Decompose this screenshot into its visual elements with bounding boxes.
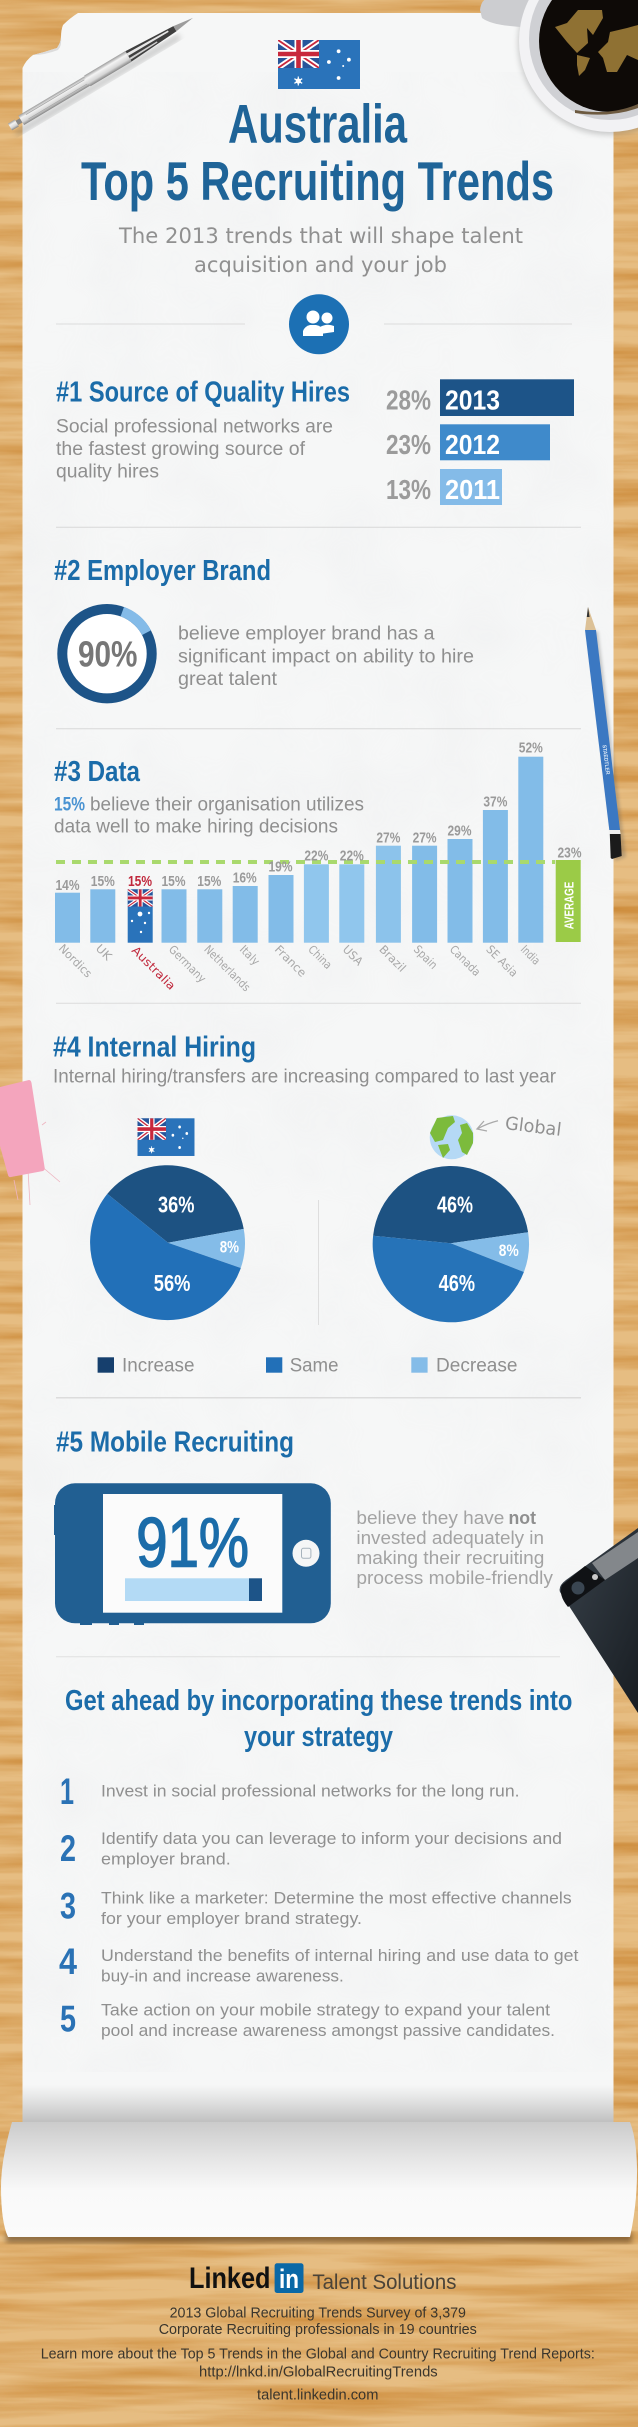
paper roll: [1, 2122, 637, 2243]
panel: recommendations: [59, 1685, 579, 2040]
list item 1: 1: [60, 1771, 74, 1812]
bar chart: Netherlands: [201, 942, 253, 994]
list item 4: 4: [59, 1941, 77, 1982]
pie chart: Global: 46%: [439, 1270, 475, 1296]
pie chart: Global: 8%: [499, 1241, 519, 1260]
text block: quality hires: [56, 461, 159, 482]
phone illustration with 91%: 91%: [136, 1504, 249, 1582]
subtitle: [118, 224, 523, 277]
pie chart: Australia: 56%: [154, 1270, 190, 1296]
heading: #3 Data: [54, 756, 141, 788]
bar chart: SE Asia: [483, 942, 521, 980]
legend: Same: [290, 1356, 338, 1377]
flag: Australia: [278, 40, 360, 89]
bar chart: Brazil: [376, 942, 409, 975]
pie chart: Australia: [90, 1165, 245, 1320]
list item 3: [60, 1886, 572, 1928]
panel: #3 data: [54, 740, 582, 994]
bar chart: 28%: [386, 384, 431, 415]
bar chart: 19%: [268, 859, 292, 876]
bar chart: 22%: [340, 848, 364, 865]
panel: #2 employer brand: [54, 555, 474, 698]
list item 2: 2: [60, 1828, 76, 1869]
bar chart: 52%: [519, 740, 543, 757]
text block: 15%: [54, 795, 85, 816]
text block: [356, 1508, 553, 1588]
bar chart: Germany: [166, 942, 209, 985]
panel: #5 mobile recruiting: [54, 1427, 553, 1625]
subtitle: acquisition and your job: [194, 253, 447, 277]
footer logo: LinkedIn Talent Solutions: [189, 2262, 456, 2295]
bar chart: AVERAGE: [563, 882, 577, 929]
heading: your strategy: [244, 1721, 393, 1753]
heading: #2 Employer Brand: [54, 555, 271, 587]
list item 3: Think like a marketer: Determine the most effective channels: [101, 1888, 572, 1907]
list item 5: pool and increase awareness amongst passive candidates.: [101, 2021, 555, 2040]
bar chart: Canada: [447, 942, 484, 979]
list item 2: [60, 1828, 562, 1869]
footer logo: LinkedIn Talent Solutions: in: [279, 2264, 299, 2294]
heading: #4 Internal Hiring: [53, 1032, 256, 1064]
bar chart: Australia: [129, 943, 178, 993]
icon: globe: [430, 1115, 474, 1159]
bar chart: USA: [340, 942, 366, 968]
bar chart: [386, 379, 574, 505]
list item 5: [60, 1999, 555, 2040]
footer text: talent.linkedin.com: [257, 2387, 378, 2403]
icon: coffee cup: [480, 0, 638, 135]
list item 4: buy-in and increase awareness.: [101, 1967, 344, 1986]
footer text: Corporate Recruiting professionals in 19 countries: [159, 2322, 477, 2338]
text block: data well to make hiring decisions: [54, 817, 338, 838]
list item 1: Invest in social professional networks for the long run.: [101, 1782, 520, 1801]
text block: believe their organisation utilizes: [90, 795, 364, 816]
bar chart: 37%: [483, 794, 507, 811]
text block: [178, 623, 474, 690]
footer text: 2013 Global Recruiting Trends Survey of 3,379: [170, 2306, 466, 2322]
footer logo: LinkedIn Talent Solutions: Talent Solutions: [312, 2271, 456, 2294]
heading: #5 Mobile Recruiting: [56, 1427, 294, 1459]
bar chart: China: [305, 942, 335, 972]
legend: [98, 1356, 517, 1377]
text block: process mobile-friendly: [356, 1568, 553, 1588]
panel: #1 source of quality hires: [56, 377, 574, 505]
phone illustration with 91%: [54, 1483, 331, 1625]
legend: Increase: [122, 1356, 194, 1377]
footer logo: LinkedIn Talent Solutions: Linked: [189, 2262, 270, 2295]
bar chart: 14%: [56, 877, 80, 894]
icon: eraser: [0, 1080, 60, 1205]
subtitle: The 2013 trends that will shape talent: [118, 224, 523, 248]
icon: Australia flag bar: [128, 889, 153, 943]
bar chart: 15%: [197, 873, 221, 890]
bar chart: France: [272, 942, 309, 980]
bar chart: 22%: [304, 848, 328, 865]
bar chart: Italy: [237, 942, 263, 968]
icon: people in circle: [289, 294, 349, 354]
bar chart: 29%: [448, 823, 472, 840]
list item 4: Understand the benefits of internal hiring and use data to get: [101, 1946, 579, 1965]
bar chart: India: [518, 942, 543, 968]
bar chart: 13%: [386, 474, 431, 505]
panel: #4 internal hiring: [53, 1032, 563, 1377]
bar chart: 27%: [376, 829, 400, 846]
bar chart: Nordics: [56, 941, 95, 980]
text block: great talent: [178, 669, 278, 690]
title: [81, 93, 554, 212]
icon: pen: [7, 13, 199, 137]
text block: [56, 416, 333, 482]
footer text: Learn more about the Top 5 Trends in the Global and Country Recruiting Trend Reports:: [41, 2347, 595, 2363]
bar chart: 2013: [445, 384, 500, 415]
donut chart 90%: 90%: [78, 634, 138, 675]
text block: not: [508, 1508, 536, 1528]
pie chart: Global: [373, 1166, 529, 1322]
title: Australia: [228, 93, 407, 155]
text block: [54, 795, 364, 838]
callout: global label with arrow: [477, 1113, 563, 1141]
text block: making their recruiting: [356, 1548, 544, 1568]
bar chart: 2012: [445, 429, 500, 460]
bar chart: 23%: [558, 844, 582, 861]
bar chart: 15%: [128, 873, 152, 890]
footer text: http://lnkd.in/GlobalRecruitingTrends: [199, 2365, 438, 2381]
list item 1: [60, 1771, 520, 1812]
bar chart: UK: [93, 941, 115, 963]
text block: believe they have: [356, 1508, 504, 1528]
text block: Internal hiring/transfers are increasing compared to last year: [53, 1066, 557, 1087]
list item 5: Take action on your mobile strategy to expand your talent: [101, 2001, 550, 2020]
text block: significant impact on ability to hire: [178, 646, 474, 667]
bar chart: 23%: [386, 429, 431, 460]
bar chart: 16%: [233, 870, 257, 887]
pie chart: Australia: 8%: [220, 1238, 239, 1257]
list item 5: 5: [60, 1999, 76, 2040]
list item 3: for your employer brand strategy.: [101, 1909, 362, 1928]
list item 2: employer brand.: [101, 1849, 231, 1868]
bar chart: 15%: [91, 873, 115, 890]
icon: pencil: STAEDTLER: [601, 745, 610, 775]
bar chart: 15%: [162, 873, 186, 890]
text block: invested adequately in: [356, 1528, 544, 1548]
list item 2: Identify data you can leverage to inform your decisions and: [101, 1829, 562, 1848]
callout: global label with arrow: Global: [504, 1113, 563, 1141]
bar chart: [55, 740, 582, 994]
donut chart 90%: [62, 609, 152, 698]
bar chart: Spain: [411, 942, 441, 972]
text block: Social professional networks are: [56, 416, 333, 437]
icon: Australia flag: [138, 1118, 194, 1156]
icon: black smartphone: [560, 1528, 638, 1713]
footer text: [41, 2306, 595, 2403]
list item 4: [59, 1941, 579, 1986]
icon: pencil: [585, 607, 626, 861]
bar chart: 2011: [445, 474, 500, 505]
heading: [65, 1685, 572, 1753]
pie chart: Global: 46%: [437, 1191, 473, 1217]
text block: believe employer brand has a: [178, 623, 435, 644]
heading: #1 Source of Quality Hires: [56, 377, 350, 409]
pie chart: Australia: 36%: [158, 1191, 194, 1217]
list item 3: 3: [60, 1886, 76, 1927]
legend: Decrease: [436, 1356, 518, 1377]
bar chart: 27%: [413, 829, 437, 846]
text block: the fastest growing source of: [56, 439, 306, 460]
